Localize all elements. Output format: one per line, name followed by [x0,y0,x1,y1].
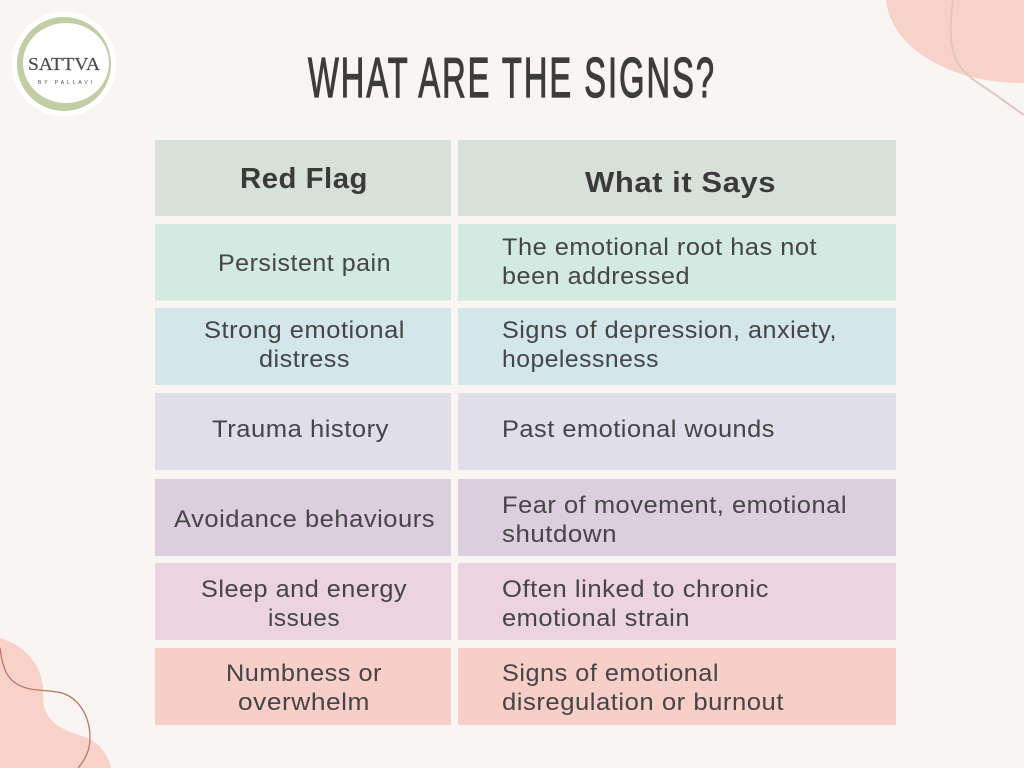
row 2: red flag: Strong emotional [204,317,405,344]
header: Red Flag: Red Flag [240,163,368,195]
row 4: red flag [155,479,451,556]
title: WHAT ARE THE SIGNS? [308,46,716,110]
row 5: red flag: issues [268,605,340,632]
row 3: red flag [155,393,451,470]
row 6: what it says: disregulation or burnout [502,689,784,716]
row 3: what it says: Past emotional wounds [502,416,775,443]
header: What it Says: What it Says [585,167,776,199]
header: What it Says [458,140,896,216]
row 6: red flag: Numbness or [226,660,382,687]
row 6: red flag: overwhelm [238,689,370,716]
row 1: red flag [155,224,451,300]
row 2: what it says: hopelessness [502,346,659,373]
decoration: top-right blob [886,0,1024,115]
row 2: red flag [155,308,451,385]
row 6: what it says [458,648,896,725]
row 1: what it says: The emotional root has not [502,234,817,261]
logo: Sattva by Pallavi: SATTVA [28,54,100,74]
row 2: red flag: distress [259,346,350,373]
logo: Sattva by Pallavi: BY PALLAVI [38,80,92,86]
header: Red Flag [155,140,451,216]
row 6: what it says: Signs of emotional [502,660,719,687]
logo: Sattva by Pallavi [12,12,116,116]
row 4: red flag: Avoidance behaviours [174,506,435,533]
row 5: red flag: Sleep and energy [201,576,407,603]
decoration: bottom-left blob [0,638,111,768]
row 4: what it says [458,479,896,556]
row 4: what it says: Fear of movement, emotional [502,492,847,519]
row 5: what it says [458,563,896,640]
row 2: what it says [458,308,896,385]
row 1: what it says [458,224,896,300]
row 5: what it says: emotional strain [502,605,690,632]
row 5: what it says: Often linked to chronic [502,576,769,603]
row 1: what it says: been addressed [502,263,690,290]
row 2: what it says: Signs of depression, anxiety, [502,317,837,344]
row 3: red flag: Trauma history [212,416,389,443]
row 5: red flag [155,563,451,640]
row 3: what it says [458,393,896,470]
row 1: red flag: Persistent pain [218,250,391,277]
row 4: what it says: shutdown [502,521,617,548]
row 6: red flag [155,648,451,725]
